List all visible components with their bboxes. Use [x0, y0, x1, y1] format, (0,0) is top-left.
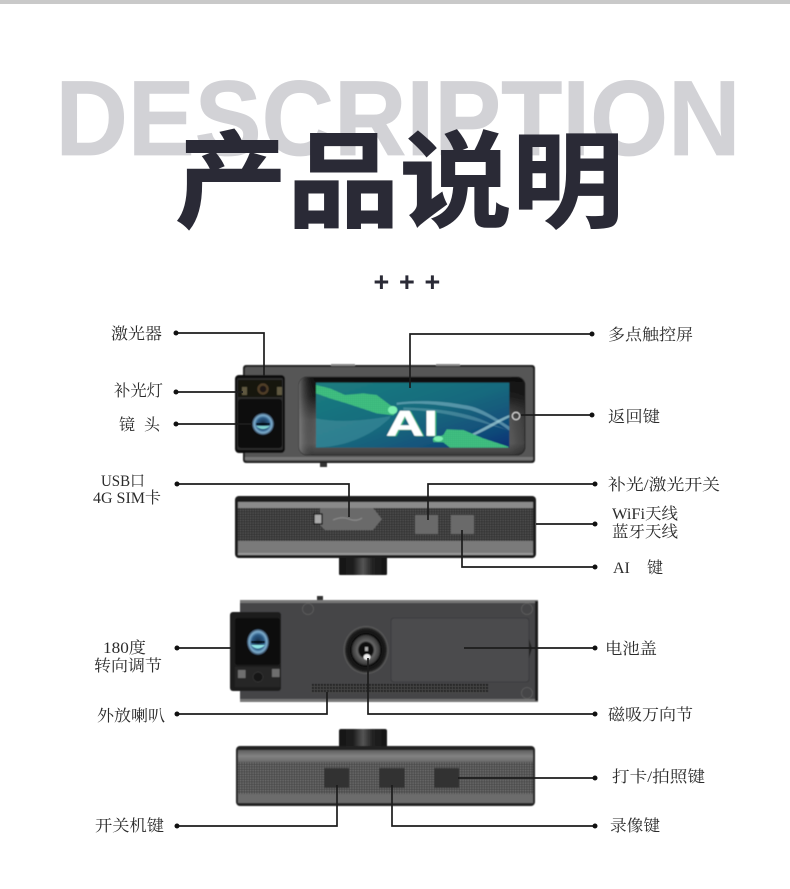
plus signs: +++ [374, 267, 440, 297]
callout: USB口 4G SIM卡 [93, 473, 349, 517]
home button [512, 412, 520, 420]
callout: 录像键: 录像键 [610, 817, 660, 835]
background heading: DESCRIPTION: DESCRIPTION [56, 58, 740, 178]
callout: 外放喇叭 [97, 692, 327, 725]
switch buttons [415, 515, 438, 534]
callout: 开关机键: 开关机键 [95, 817, 164, 835]
battery latch [529, 639, 532, 658]
callout: 录像键 [392, 785, 660, 835]
button: photo [434, 768, 459, 788]
title: 产品说明: 产品说明 [175, 98, 624, 250]
callout: 补光灯 [114, 382, 243, 400]
battery cover [391, 618, 529, 682]
callout: 电池盖 [464, 640, 657, 658]
callout: 激光器 [111, 325, 264, 376]
callout: 打卡/拍照键: 打卡/拍照键 [612, 768, 705, 786]
green hands [316, 385, 397, 415]
callout: AI 键: 键 [647, 559, 663, 577]
callout: 多点触控屏: 多点触控屏 [608, 326, 693, 344]
callout: 磁吸万向节 [368, 658, 693, 724]
AI wordmark: AI [386, 404, 438, 444]
camera module [235, 375, 285, 453]
callout: 返回键: 返回键 [608, 408, 660, 426]
callout: USB口 4G SIM卡: USB口 [101, 473, 145, 490]
screen: AI artwork [316, 383, 509, 448]
callout: USB口 4G SIM卡: 4G SIM卡 [93, 489, 161, 507]
callout: 多点触控屏 [410, 326, 693, 388]
callout: 磁吸万向节: 磁吸万向节 [608, 706, 693, 724]
callout: WiFi天线 蓝牙天线: WiFi天线 [612, 505, 678, 523]
speaker grille [311, 684, 488, 693]
button: record [379, 768, 405, 788]
screen bezel [299, 377, 525, 455]
rotated camera module [230, 612, 281, 691]
callout: 镜头: 镜 头 [119, 415, 161, 434]
callout: 电池盖: 电池盖 [605, 640, 657, 658]
panel: front view device [235, 364, 535, 467]
callout: 镜头 [119, 415, 252, 434]
callout: 补光灯: 补光灯 [114, 382, 163, 400]
callout: WiFi天线 蓝牙天线 [536, 505, 678, 541]
callout: AI 键: AI [613, 560, 630, 577]
panel: rear view device [230, 596, 538, 702]
callout: 返回键 [521, 408, 660, 426]
callout: 打卡/拍照键 [458, 768, 705, 786]
button: power [324, 768, 349, 788]
top bar [0, 0, 790, 4]
callout: 180度 转向调节 [94, 639, 233, 675]
callout: WiFi天线 蓝牙天线: 蓝牙天线 [612, 522, 678, 541]
USB cover [314, 508, 382, 530]
callout: 开关机键 [95, 785, 337, 835]
callout: AI 键 [462, 530, 663, 577]
callout: 外放喇叭: 外放喇叭 [97, 707, 165, 725]
callout: 激光器: 激光器 [111, 325, 162, 343]
callout: 补光/激光开关 [428, 476, 720, 520]
callout: 补光/激光开关: 补光/激光开关 [608, 476, 720, 494]
callout: 180度 转向调节: 转向调节 [94, 657, 162, 675]
panel: top edge view device [235, 496, 536, 575]
callout: 180度 转向调节: 180度 [103, 639, 146, 657]
magnetic mount [344, 626, 388, 674]
panel: bottom edge view device [236, 729, 535, 806]
